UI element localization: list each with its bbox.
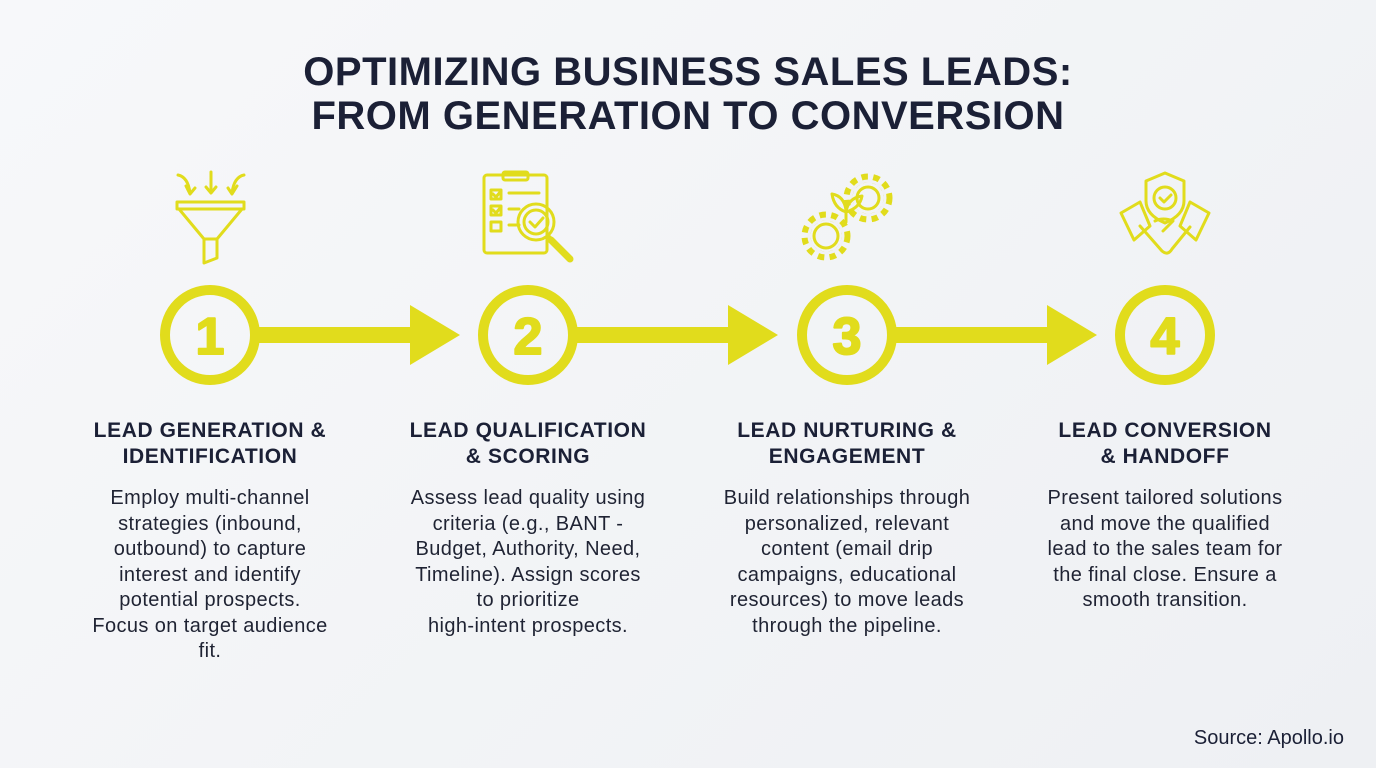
panel: step 2: & SCORING [466,445,590,468]
panel: step 4: LEAD CONVERSION [1058,419,1272,442]
step circles and arrows: 4 [1151,308,1180,366]
panel: step 2: Assess lead quality using [411,487,645,509]
step circles and arrows: 1 [196,308,224,366]
panel: step 2 [410,419,646,636]
panel: step 4: the final close. Ensure a [1053,564,1277,586]
panel: step 4: & HANDOFF [1100,445,1230,468]
panel: step 1: Employ multi-channel [110,487,310,509]
panel: step 3: resources) to move leads [730,589,964,611]
icon: clipboard checklist [484,172,571,259]
panel: step 2: LEAD QUALIFICATION [410,419,646,442]
title: FROM GENERATION TO CONVERSION [311,94,1065,138]
panel: step 3: campaigns, educational [738,564,956,586]
panel: step 3: ENGAGEMENT [769,445,925,468]
source: Source: Apollo.io [1194,727,1344,749]
step circles and arrows: 2 [514,308,542,366]
panel: step 1: fit. [199,640,221,662]
panel: step 1 [92,419,328,662]
panel: step 2: high-intent prospects. [428,614,628,636]
panel: step 4: lead to the sales team for [1048,538,1282,560]
panel: step 1: IDENTIFICATION [123,445,297,468]
panel: step 3: content (email drip [761,538,933,560]
panel: step 2: criteria (e.g., BANT - [433,512,623,534]
panel: step 3 [724,419,970,636]
panel: step 4: Present tailored solutions [1048,487,1282,509]
title: OPTIMIZING BUSINESS SALES LEADS: [303,50,1073,94]
panel: step 2: Timeline). Assign scores [415,564,641,586]
panel: step 3: through the pipeline. [752,614,942,636]
panel: step 2: Budget, Authority, Need, [416,538,640,560]
panel: step 1: potential prospects. [119,589,301,611]
panel: step 4: and move the qualified [1060,512,1270,534]
icon: gears with plant [806,178,888,256]
panel: step 1: Focus on target audience [92,614,328,636]
panel: step 2: to prioritize [476,589,580,611]
panel: step 1: LEAD GENERATION & [94,419,326,442]
panel: step 3: Build relationships through [724,487,970,509]
panel: step 3: personalized, relevant [745,512,949,534]
icon: funnel [177,172,244,263]
panel: step 1: strategies (inbound, [118,512,302,534]
step circles and arrows [165,290,1210,380]
panel: step 4: smooth transition. [1082,589,1248,611]
icon: shield handshake [1121,173,1209,253]
panel: step 1: outbound) to capture [114,538,306,560]
title [303,50,1073,138]
panel: step 1: interest and identify [119,564,301,586]
panel: step 3: LEAD NURTURING & [737,419,957,442]
panel: step 4 [1048,419,1282,611]
step circles and arrows: 3 [833,308,861,366]
